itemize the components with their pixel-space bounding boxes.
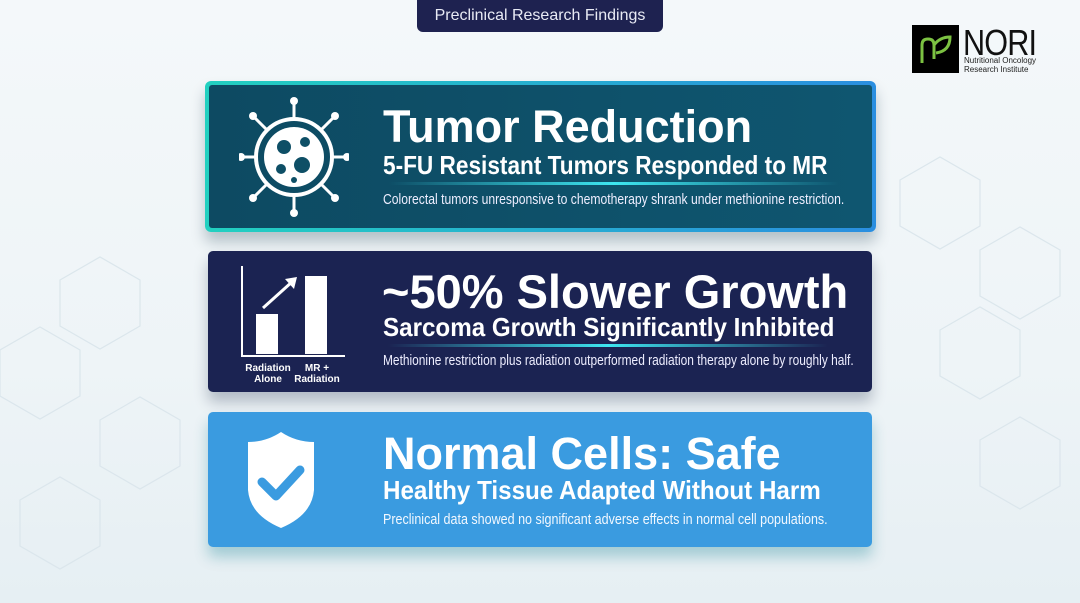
bar chart icon: Radiation [245, 363, 291, 374]
heading: Tumor Reduction [383, 101, 752, 152]
heading: ~50% Slower Growth [382, 265, 848, 318]
bar chart icon [241, 266, 345, 385]
subheading: 5-FU Resistant Tumors Responded to MR [383, 150, 827, 180]
logo icon [912, 25, 959, 73]
description: Colorectal tumors unresponsive to chemotherapy shrank under methionine restriction. [383, 191, 844, 208]
subheading: Healthy Tissue Adapted Without Harm [383, 475, 821, 505]
description: Methionine restriction plus radiation outperformed radiation therapy alone by roughly half. [383, 352, 854, 369]
panel: normal cells safe [208, 412, 872, 547]
description: Preclinical data showed no significant adverse effects in normal cell populations. [383, 511, 828, 528]
logo: Research Institute [964, 65, 1028, 74]
logo [912, 22, 1036, 74]
bar chart icon: Alone [254, 374, 282, 385]
heading: Normal Cells: Safe [383, 428, 781, 479]
bar chart icon: MR + [305, 363, 329, 374]
logo text: NORI [963, 22, 1036, 63]
panel: slower growth [208, 251, 872, 392]
header pill [417, 0, 663, 32]
panel: tumor reduction [205, 81, 876, 232]
header pill: Preclinical Research Findings [435, 7, 645, 24]
logo: Nutritional Oncology [964, 56, 1036, 65]
icon: shield check [248, 432, 314, 528]
icon: tumor cell [239, 97, 349, 217]
subheading: Sarcoma Growth Significantly Inhibited [383, 312, 834, 342]
bar chart icon: Radiation [294, 374, 340, 385]
